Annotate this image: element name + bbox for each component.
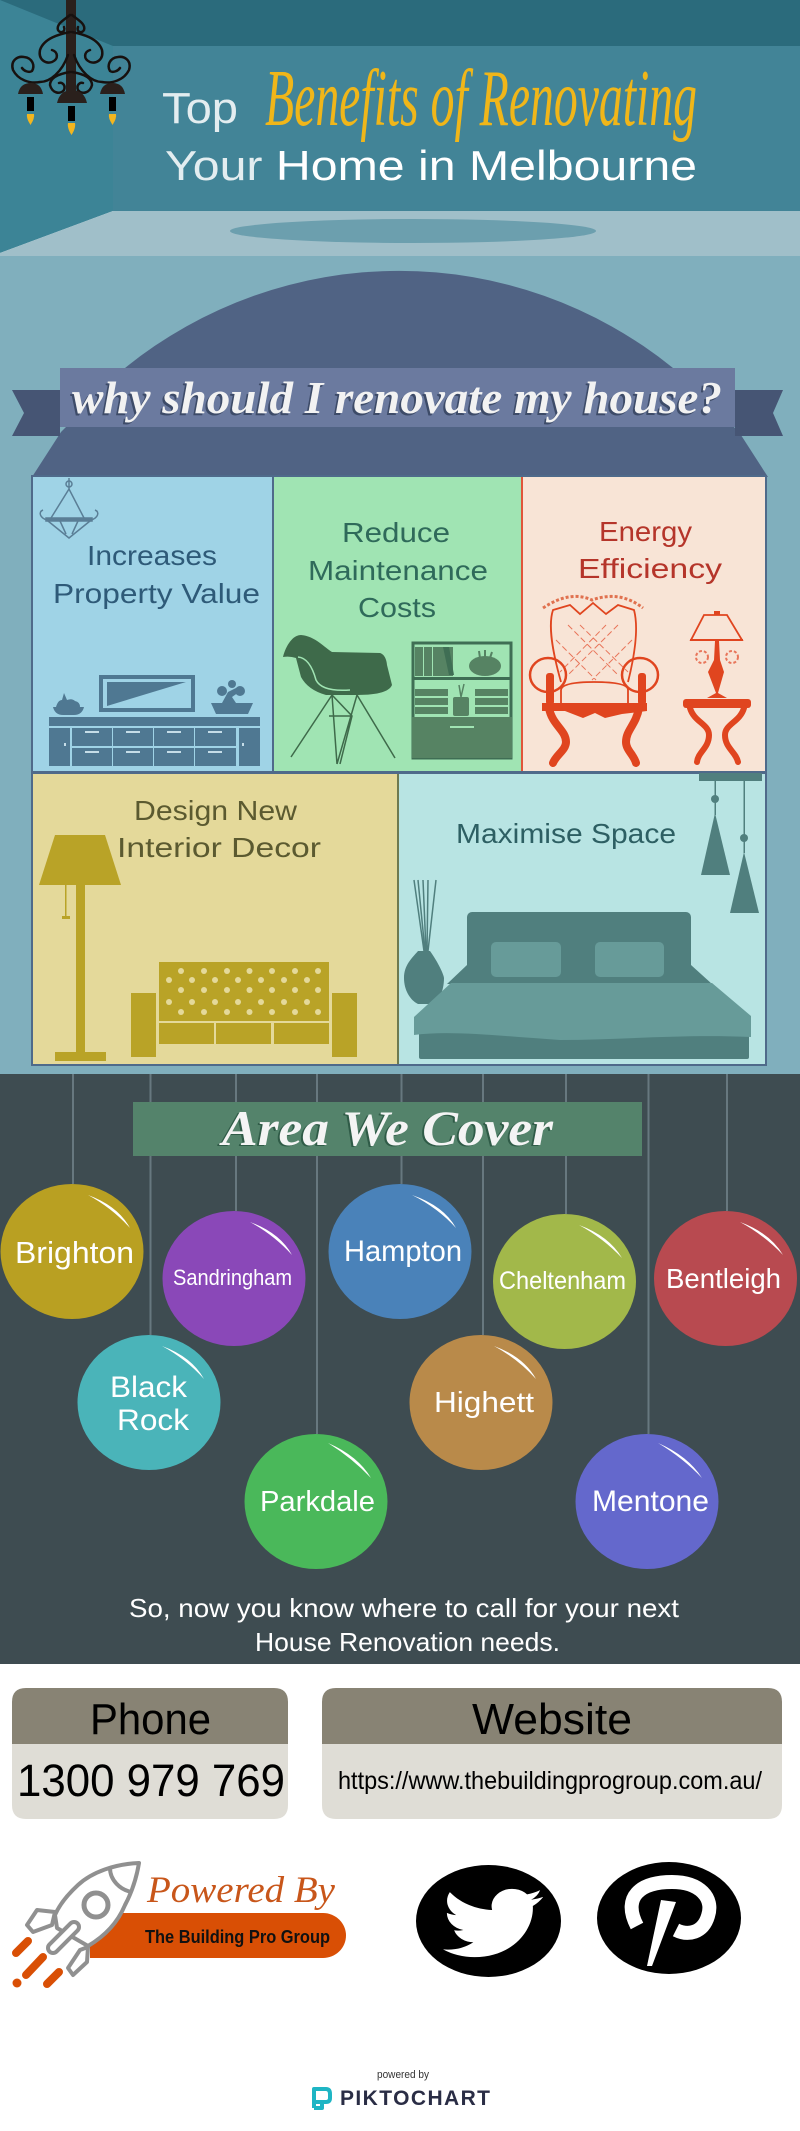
icon: bookshelf [412, 643, 512, 758]
text: reduce maintenance costs: Costs [358, 592, 436, 623]
title: Top [162, 84, 238, 133]
text: energy efficiency [578, 516, 722, 584]
text: reduce maintenance costs: Reduce [342, 517, 450, 548]
icon: twitter [416, 1865, 561, 1977]
icon: piktochart logo [314, 2089, 330, 2108]
icon: table lamp [683, 611, 751, 762]
icon: vase with reeds [404, 880, 444, 1004]
icon: bed [414, 912, 751, 1059]
bauble: brighton [0, 1184, 144, 1319]
text: maximise space: Maximise Space [456, 818, 676, 849]
banner: area we cover [133, 1100, 642, 1156]
icon: rocket exhaust [12, 1941, 59, 1988]
icon: sofa [131, 962, 357, 1057]
icon: sideboard [49, 717, 260, 766]
title [162, 55, 697, 189]
bauble: sandringham [162, 1211, 306, 1346]
bauble: black rock: Black [110, 1371, 188, 1404]
bauble: black rock [78, 1335, 220, 1470]
title: Your Home in Melbourne [165, 142, 697, 189]
panel: reduce maintenance costs [273, 476, 522, 772]
logo: powered by the building pro group: The Building Pro Group [145, 1927, 330, 1947]
bauble: bentleigh [654, 1211, 797, 1346]
panel: maximise space [397, 773, 766, 1065]
bauble: brighton: Brighton [15, 1235, 134, 1270]
text: design new interior decor: Design New [134, 795, 298, 826]
card: phone: 1300 979 769 [17, 1755, 285, 1806]
text: increases property value: Property Value [53, 578, 260, 609]
bauble: hampton: Hampton [344, 1235, 462, 1268]
banner: why should I renovate [12, 368, 783, 436]
bauble: mentone: Mentone [592, 1485, 709, 1518]
logo: powered by the building pro group [12, 1863, 346, 1988]
icon: fruit bowl [53, 693, 84, 715]
panel: design new interior decor [32, 773, 398, 1065]
hanging strings [73, 1074, 727, 1434]
banner: why should I renovate: why should I renovate my house? [72, 372, 722, 423]
footer: piktochart mark: powered by [377, 2069, 429, 2081]
icon: pendant lights [699, 773, 762, 913]
text: design new interior decor [117, 795, 321, 863]
icon: pinterest [597, 1862, 741, 1974]
panel: area we cover background [0, 1074, 800, 1664]
card: phone [12, 1688, 288, 1819]
bauble: hampton [328, 1184, 472, 1319]
icon: bonsai [211, 680, 253, 714]
card: phone: Phone [90, 1695, 211, 1744]
text: energy efficiency: Efficiency [578, 553, 722, 584]
banner: area we cover: Area We Cover [219, 1100, 554, 1156]
bauble: cheltenham: Cheltenham [499, 1267, 626, 1295]
text: reduce maintenance costs [308, 517, 488, 623]
bauble: highett [410, 1335, 552, 1470]
bauble: mentone [576, 1434, 718, 1569]
icon: picture frame [101, 677, 193, 710]
logo: powered by the building pro group: Powered By [146, 1870, 336, 1911]
card: website: https://www.thebuildingprogroup.com.au/ [338, 1767, 762, 1795]
pill [90, 1913, 346, 1958]
icon: small chandelier [40, 478, 98, 538]
card: website [322, 1688, 782, 1819]
text: increases property value [53, 540, 260, 609]
text: design new interior decor: Interior Decor [117, 832, 321, 863]
icon: floor lamp [39, 835, 121, 1061]
panel: room header [0, 0, 800, 256]
footer: piktochart mark: PIKTOCHART [340, 2087, 490, 2110]
panel: house section background [0, 256, 800, 1074]
bauble: parkdale [244, 1434, 388, 1569]
icon: armchair [530, 596, 658, 763]
bauble: cheltenham [493, 1214, 636, 1349]
panel: energy efficiency [521, 476, 766, 772]
bauble: bentleigh: Bentleigh [666, 1263, 781, 1294]
card: website: Website [472, 1695, 632, 1744]
closing text: So, now you know where to call for your next [129, 1593, 680, 1623]
bauble: sandringham: Sandringham [173, 1265, 292, 1290]
footer: piktochart mark [314, 2069, 490, 2110]
icon: chandelier [12, 0, 130, 135]
text: increases property value: Increases [87, 540, 217, 571]
text: energy efficiency: Energy [599, 516, 692, 547]
icon: rocket [27, 1863, 139, 1975]
closing text [129, 1593, 680, 1657]
icon: shell chair [283, 635, 395, 764]
bauble: parkdale: Parkdale [260, 1486, 375, 1518]
panel: increases property value [32, 476, 273, 772]
bauble: highett: Highett [434, 1387, 534, 1419]
roof [32, 271, 768, 477]
text: reduce maintenance costs: Maintenance [308, 555, 488, 586]
bauble: black rock: Rock [117, 1404, 190, 1437]
closing text: House Renovation needs. [255, 1627, 560, 1657]
